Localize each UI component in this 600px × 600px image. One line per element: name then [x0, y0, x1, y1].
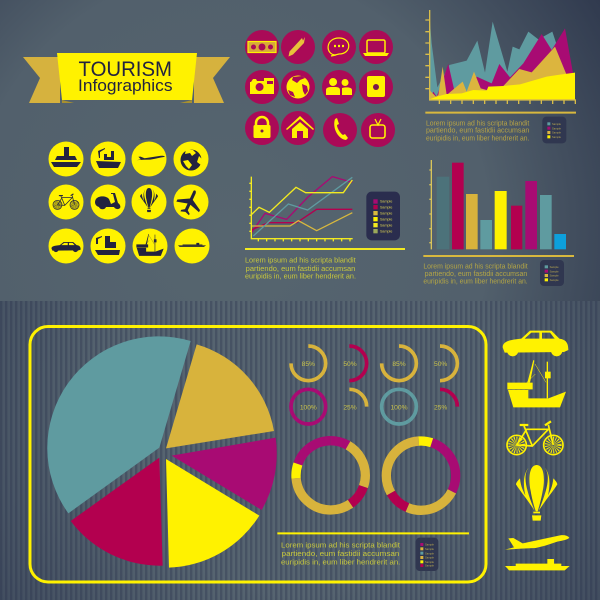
- icon: car: [503, 331, 568, 356]
- icon: fishing boat: [136, 234, 164, 256]
- legend: Sample: [380, 223, 392, 227]
- legend: Sample: [550, 274, 559, 278]
- caption: partiendo, eum fastidii accumsan: [426, 126, 529, 135]
- icon: telephone: [334, 118, 348, 140]
- legend: Sample: [425, 560, 435, 564]
- icon: tug boat: [95, 236, 120, 255]
- icon: banknote: [248, 42, 276, 52]
- slice: purple: [172, 438, 277, 510]
- title ribbon: [23, 53, 230, 103]
- icon: people: [326, 78, 352, 95]
- ring: 85% gold second: [382, 346, 416, 381]
- icon: balloon: [140, 188, 158, 212]
- icon: scooter: [95, 193, 120, 209]
- icon: hot air balloon: [516, 465, 557, 521]
- ring: 85% gold: 85%: [302, 361, 315, 368]
- legend: Sample: [552, 135, 562, 139]
- caption: Lorem ipsum ad his scripta blandit: [426, 119, 529, 128]
- area chart: [425, 10, 576, 143]
- ring: 85% gold: [291, 346, 326, 381]
- icon: pen: [288, 37, 305, 56]
- ring: 25% gold: [343, 389, 367, 411]
- legend: Sample: [425, 556, 435, 560]
- teal area series: [429, 13, 575, 99]
- caption: Lorem ipsum ad his scripta blandit: [245, 256, 356, 265]
- slice: yellow: [166, 459, 259, 568]
- legend: [542, 117, 566, 143]
- top background: [0, 0, 600, 301]
- icon: bicycle: [507, 421, 563, 455]
- caption: [426, 119, 529, 143]
- icon: globe: [286, 76, 310, 98]
- legend: Sample: [380, 229, 392, 233]
- icon: television: [370, 119, 385, 138]
- ring: 85% gold second: 85%: [392, 361, 406, 368]
- caption: euripidis in, eum liber hendrerit an.: [426, 134, 529, 143]
- pie chart: [47, 336, 277, 568]
- purple area series: [429, 28, 575, 99]
- icon: house: [286, 116, 314, 138]
- icon: airplane top: [173, 185, 207, 219]
- caption: partiendo, eum fastidii accumsan: [282, 549, 399, 558]
- ring: 50% gold: [434, 346, 457, 381]
- ring: 50% crimson: [343, 346, 367, 381]
- icon: chat bubble: [328, 38, 349, 56]
- slice: gold: [166, 344, 274, 448]
- caption: [281, 540, 400, 567]
- donut: right: [386, 441, 456, 510]
- legend: Sample: [380, 205, 392, 209]
- icon: bicycle: [53, 194, 79, 209]
- caption: partiendo, eum fastidii accumsan: [246, 264, 355, 273]
- ring: 100% purple: [291, 389, 326, 424]
- icon: fishing boat: [507, 360, 566, 407]
- legend: Sample: [425, 543, 435, 547]
- icon: cargo ship: [96, 148, 121, 168]
- caption: partiendo, eum fastidii accumsan: [425, 269, 527, 278]
- caption: euripidis in, eum liber hendrerit an.: [245, 272, 356, 281]
- chart lines: [251, 177, 352, 236]
- legend: [416, 538, 438, 571]
- progress rings and donuts: [291, 346, 457, 510]
- legend: [540, 260, 564, 286]
- legend: Sample: [552, 122, 562, 126]
- icon grid: travel, magenta circles: [245, 30, 395, 147]
- yellow area series: [429, 73, 575, 99]
- icon grid: transport, yellow circles: [48, 142, 210, 264]
- caption: [423, 261, 528, 286]
- legend: Sample: [380, 200, 392, 204]
- legend: Sample: [425, 564, 435, 568]
- ring: 100% purple: 100%: [300, 404, 317, 411]
- subtitle text: Infographics: [78, 77, 172, 95]
- bar chart: [423, 160, 574, 286]
- icon: padlock: [254, 117, 270, 138]
- chart axes: [249, 177, 353, 241]
- caption: [245, 256, 356, 281]
- striped lower background: [0, 301, 600, 600]
- chart axis: [429, 160, 431, 249]
- caption: Lorem ipsum ad his scripta blandit: [281, 540, 400, 549]
- ring: 100% teal: [382, 389, 416, 424]
- icon: cruise ship: [51, 147, 81, 167]
- icon: airplane: [505, 535, 569, 550]
- legend: Sample: [550, 265, 559, 269]
- icon: globe: [180, 149, 202, 170]
- chart axes: [425, 10, 576, 104]
- icon: car: [51, 242, 81, 252]
- icon: notebook: [367, 76, 385, 97]
- ring: 25% gold: 25%: [343, 404, 357, 411]
- icon: airplane side: [137, 156, 165, 160]
- legend: Sample: [550, 278, 559, 282]
- legend: Sample: [552, 131, 562, 135]
- panel: rounded frame: [30, 326, 486, 582]
- legend: Sample: [425, 547, 435, 551]
- gold area series: [429, 47, 575, 99]
- donut: left: [296, 441, 365, 510]
- title text: TOURISM: [78, 58, 172, 81]
- caption: Lorem ipsum ad his scripta blandit: [423, 261, 528, 270]
- icon: camera: [250, 78, 274, 94]
- legend: Sample: [552, 126, 562, 130]
- slice: crimson: [71, 458, 163, 566]
- caption: euripidis in, eum liber hendrerit an.: [423, 277, 528, 286]
- ring: 50% crimson: 50%: [343, 361, 357, 368]
- icon: liner: [178, 243, 206, 247]
- line chart: [245, 177, 405, 281]
- ring: 25% crimson: 25%: [434, 404, 447, 411]
- ring: 100% teal: 100%: [390, 404, 408, 411]
- caption: euripidis in, eum liber hendrerit an.: [281, 558, 400, 567]
- bars: [437, 163, 566, 249]
- legend: Sample: [550, 269, 559, 273]
- ring: 50% gold: 50%: [434, 361, 447, 368]
- legend: Sample: [380, 217, 392, 221]
- icon: laptop: [363, 40, 389, 56]
- ring: 25% crimson: [434, 389, 457, 411]
- panel caption block: [277, 533, 469, 571]
- legend: Sample: [380, 211, 392, 215]
- legend: Sample: [425, 551, 435, 555]
- legend: [366, 192, 400, 240]
- slice: teal: [47, 336, 191, 513]
- transport icon column: [503, 331, 570, 570]
- icon: ocean liner: [505, 559, 570, 570]
